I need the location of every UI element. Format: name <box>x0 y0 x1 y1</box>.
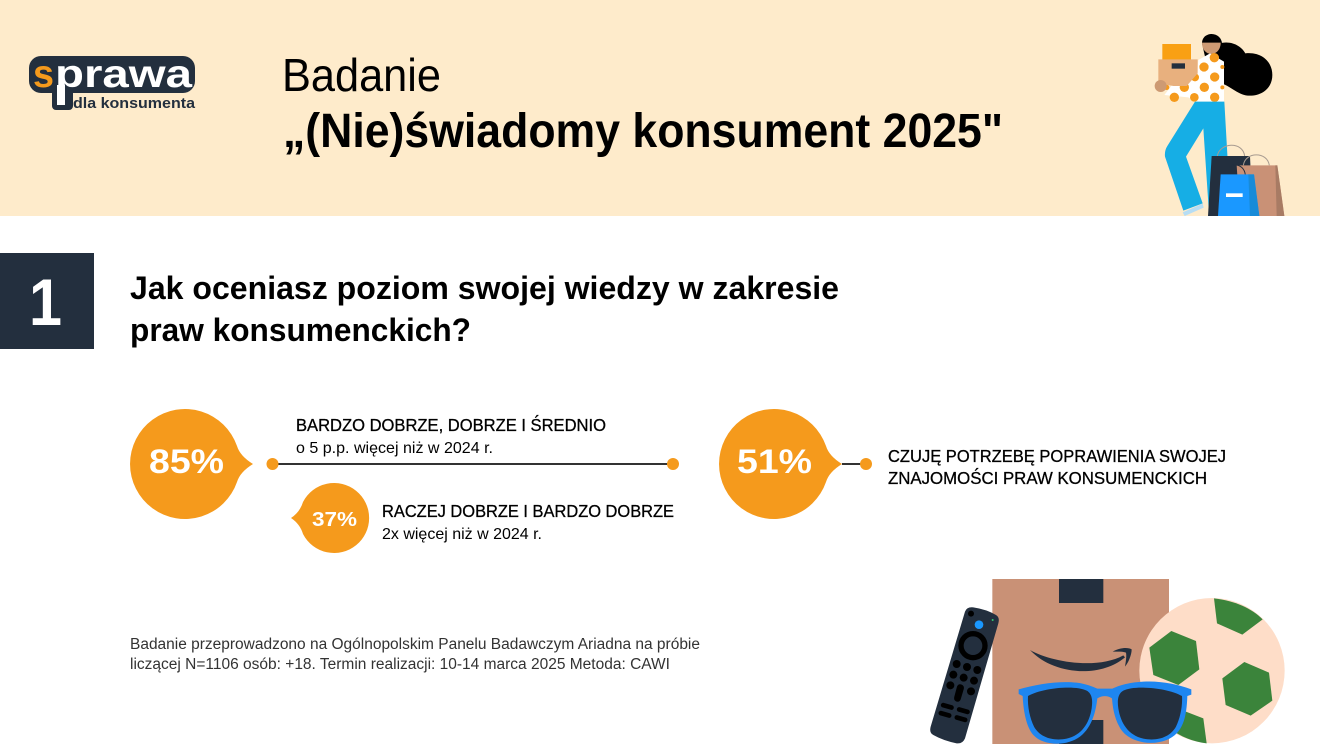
text: raczej dobrze i bardzo dobrze: 2x więcej niż w 2024 r. <box>382 526 542 543</box>
text: raczej dobrze i bardzo dobrze <box>382 501 674 543</box>
connector: 51% <box>842 458 872 470</box>
text: bardzo dobrze, dobrze i średnio: BARDZO DOBRZE, DOBRZE I ŚREDNIO <box>296 414 606 435</box>
illustration: remote, parcel, ball and sunglasses <box>930 579 1285 744</box>
remote control <box>930 607 999 743</box>
methodology note: liczącej N=1106 osób: +18. Termin realizacji: 10-14 marca 2025 Metoda: CAWI <box>130 656 670 673</box>
logo: sprawa dla konsumenta <box>29 53 196 112</box>
text: bardzo dobrze, dobrze i średnio: o 5 p.p. więcej niż w 2024 r. <box>296 440 493 457</box>
stat bubble: 85% <box>130 409 253 519</box>
title line: (Nie)świadomy konsument 2025: „(Nie)świadomy konsument 2025" <box>283 105 1003 158</box>
logo: sprawa dla konsumenta: prawa <box>55 53 192 96</box>
question heading: Jak oceniasz poziom swojej wiedzy w zakresie <box>130 270 839 306</box>
text: czuję potrzebę poprawienia: ZNAJOMOŚCI PRAW KONSUMENCKICH <box>888 467 1207 488</box>
logo: sprawa dla konsumenta: s <box>33 53 54 96</box>
illustration: woman with shopping bags <box>1155 34 1284 216</box>
soccer ball <box>1139 598 1285 743</box>
stat bubble: 51% <box>719 409 842 519</box>
logo: sprawa dla konsumenta: dla konsumenta <box>73 95 196 112</box>
methodology note: Badanie przeprowadzono na Ogólnopolskim Panelu Badawczym Ariadna na próbie <box>130 636 700 653</box>
sunglasses <box>1019 681 1191 744</box>
text: czuję potrzebę poprawienia: CZUJĘ POTRZEBĘ POPRAWIENIA SWOJEJ <box>888 446 1226 466</box>
question heading <box>130 270 839 348</box>
stat bubble: 37%: 37% <box>312 509 357 531</box>
question heading: praw konsumenckich? <box>130 312 471 348</box>
text: bardzo dobrze, dobrze i średnio <box>296 414 606 457</box>
text: raczej dobrze i bardzo dobrze: RACZEJ DOBRZE I BARDZO DOBRZE <box>382 501 674 521</box>
section number badge <box>0 253 94 349</box>
header band <box>0 0 1320 216</box>
stat bubble: 85%: 85% <box>149 443 224 481</box>
connector line with dots <box>266 458 679 470</box>
section number badge: 1 <box>29 265 62 339</box>
stat bubble: 37% <box>291 483 369 553</box>
text: czuję potrzebę poprawienia <box>888 446 1226 488</box>
stat bubble: 51%: 51% <box>737 443 812 481</box>
parcel box <box>992 579 1169 744</box>
methodology note <box>130 636 700 673</box>
title line: Badanie: Badanie <box>282 49 441 101</box>
